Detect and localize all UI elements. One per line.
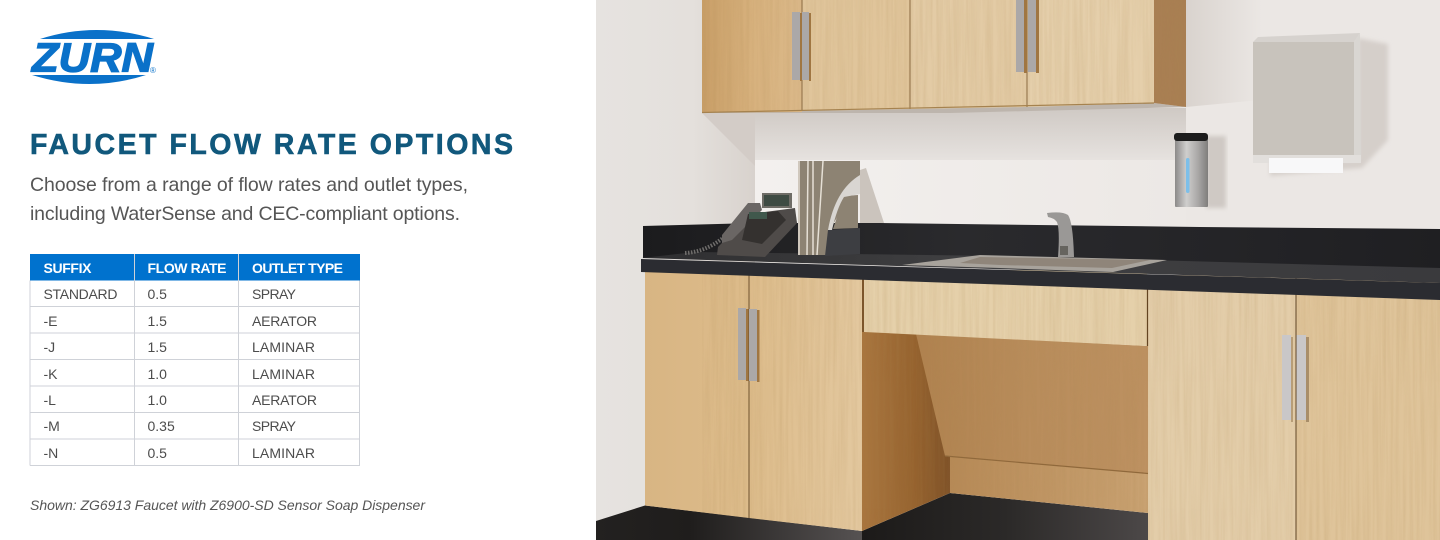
- table header: SUFFIX: [44, 260, 92, 276]
- text block: intro: including WaterSense and CEC-compliant options.: [30, 203, 460, 225]
- text block: intro: [30, 174, 468, 225]
- table rows: -J: [44, 339, 55, 355]
- wood grain overlay: [702, 0, 1440, 540]
- knee space lower panel: [950, 455, 1148, 513]
- table rows: -E: [44, 313, 58, 329]
- towel dispenser shadow: [1270, 38, 1388, 176]
- knee space rear slanted panel: [916, 334, 1148, 473]
- left wall: [596, 0, 755, 540]
- faucet: [1047, 212, 1074, 257]
- cabinet handles: [738, 0, 1309, 422]
- table rows: LAMINAR: [252, 366, 315, 382]
- logo: Zurn: ®: [150, 66, 156, 75]
- photo: break room counter: [596, 0, 1440, 540]
- upper cabinets: [702, 0, 1186, 113]
- back wall: [755, 0, 1440, 300]
- text block: intro: Choose from a range of flow rates and outlet types,: [30, 174, 468, 196]
- phone: [685, 193, 797, 257]
- table rows: 0.5: [148, 286, 167, 302]
- table rows: 0.5: [148, 445, 167, 461]
- table rows: -M: [44, 418, 60, 434]
- apron: [864, 270, 1147, 346]
- table rows: AERATOR: [252, 392, 317, 408]
- table rows: -N: [44, 445, 58, 461]
- table rows: 0.35: [148, 418, 175, 434]
- sink: [902, 255, 1167, 272]
- table header: [30, 254, 360, 280]
- table rows: [44, 286, 317, 461]
- table rows: 1.5: [148, 339, 167, 355]
- logo: Zurn: ZURN: [31, 34, 154, 80]
- countertop: [641, 252, 1440, 300]
- table rows: SPRAY: [252, 286, 297, 302]
- lower right cabinet: [1148, 275, 1440, 540]
- table rows: SPRAY: [252, 418, 297, 434]
- caption: Shown: ZG6913 Faucet with Z6900-SD Sensor Soap Dispenser: [30, 497, 426, 513]
- title: FAUCET FLOW RATE OPTIONS: [30, 129, 513, 161]
- table rows: 1.0: [148, 366, 167, 382]
- towel dispenser: [1253, 33, 1361, 173]
- table rows: STANDARD: [44, 286, 118, 302]
- panel: text and table: [0, 0, 596, 540]
- table rows: -L: [44, 392, 56, 408]
- backsplash: [643, 223, 1440, 270]
- dark seams around apron: [863, 275, 1148, 346]
- table header: OUTLET TYPE: [252, 260, 343, 276]
- table rows: 1.0: [148, 392, 167, 408]
- floor: [596, 493, 1148, 540]
- table rows: LAMINAR: [252, 445, 315, 461]
- file holder shadow: [860, 168, 885, 226]
- table header: FLOW RATE: [148, 260, 226, 276]
- table rows: AERATOR: [252, 313, 317, 329]
- table: flow rates: [30, 254, 360, 466]
- file holder: [798, 161, 860, 256]
- knee space side panel: [862, 270, 950, 531]
- table rows: LAMINAR: [252, 339, 315, 355]
- soap dispenser: [1174, 133, 1226, 208]
- table rows: 1.5: [148, 313, 167, 329]
- table rows: -K: [44, 366, 58, 382]
- lower left cabinet: [645, 268, 862, 531]
